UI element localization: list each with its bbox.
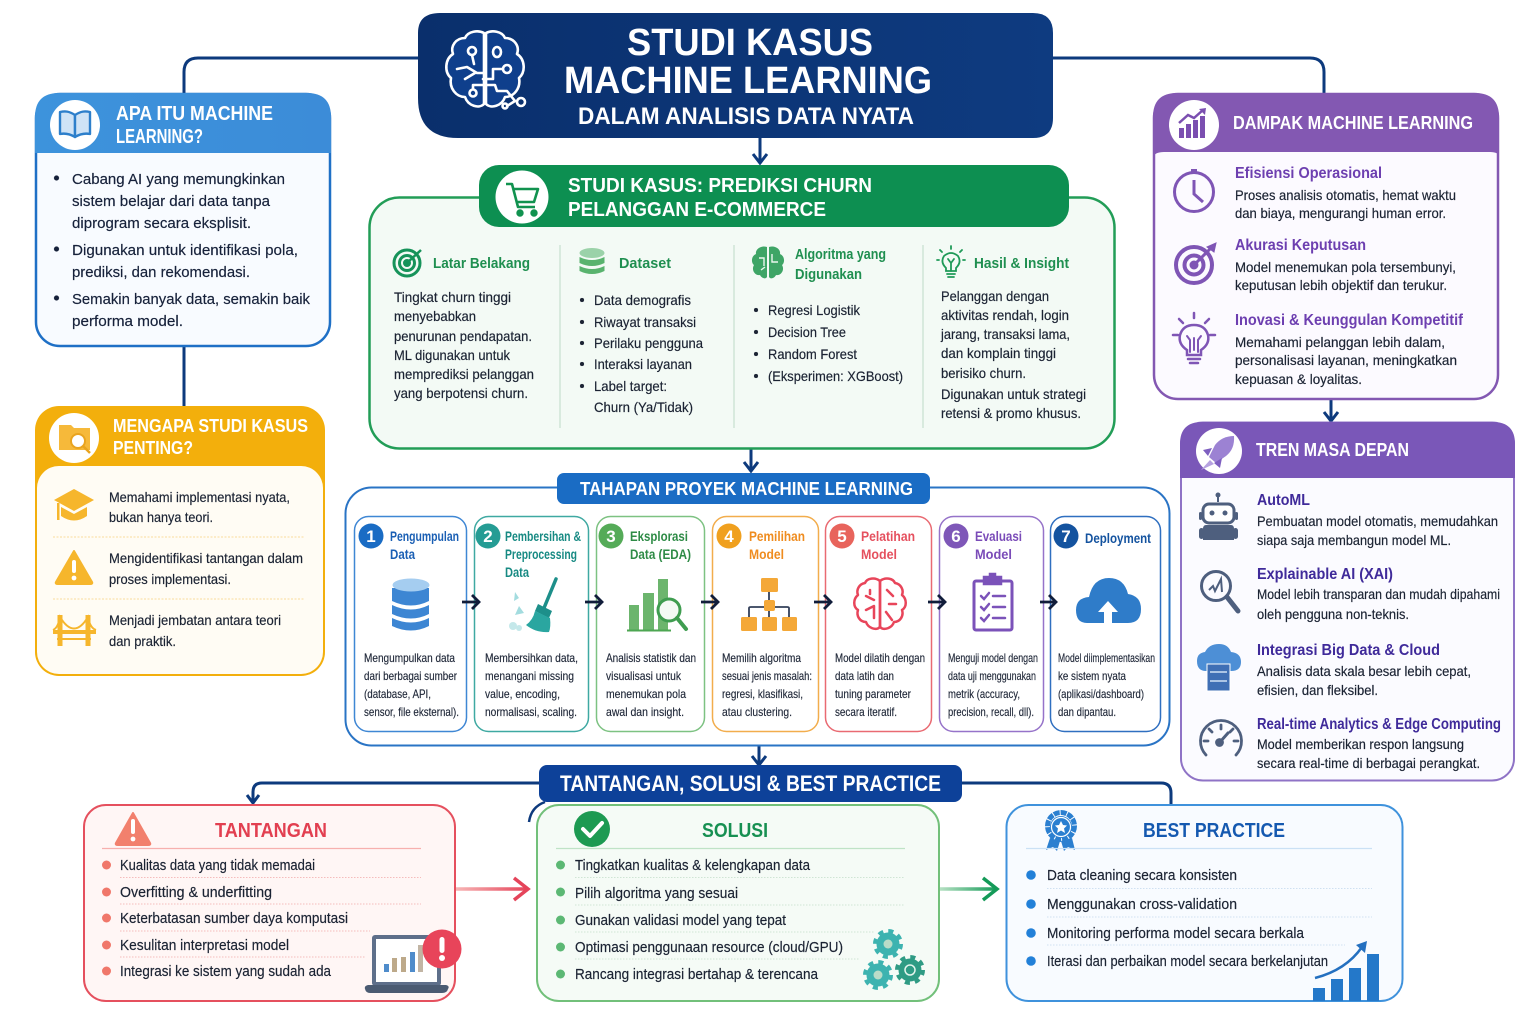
- icon: rocket: [1201, 436, 1234, 470]
- icon: green brain: [752, 247, 784, 278]
- icon: open book: [60, 111, 90, 137]
- trend 2: Explainable AI (XAI): [1257, 566, 1393, 583]
- header text: STUDI KASUS: PREDIKSI CHURN: [568, 175, 872, 197]
- icon: database: [580, 248, 604, 274]
- heading: BEST PRACTICE: [1143, 820, 1285, 842]
- body text: menyebabkan: [394, 308, 476, 324]
- icon: clock: [1174, 170, 1214, 212]
- stage title: Data: [390, 546, 415, 562]
- trend 2: oleh pengguna non-teknis.: [1257, 606, 1409, 622]
- trend 1: [1257, 492, 1498, 548]
- trend 1: siapa saja membangun model ML.: [1257, 532, 1451, 548]
- band: tantangan solusi best practice: [539, 765, 962, 802]
- icon: ribbon badge: [1046, 812, 1075, 851]
- heading: PENTING?: [113, 438, 193, 458]
- stage title: [975, 528, 1022, 562]
- panel: best practice: [1006, 805, 1402, 1001]
- title banner: [418, 13, 1053, 138]
- reason 2: Mengidentifikasi tantangan dalam: [109, 550, 303, 566]
- challenge list: Keterbatasan sumber daya komputasi: [120, 911, 348, 927]
- body text: [940, 288, 1086, 421]
- body text: Pelanggan dengan: [941, 288, 1049, 304]
- icon: laptop with alert: [365, 930, 462, 993]
- number badge: [358, 524, 384, 548]
- title text: DALAM ANALISIS DATA NYATA: [578, 103, 914, 130]
- number badge: 2: [483, 527, 493, 546]
- icon: gauge: [1200, 721, 1241, 755]
- heading: Latar Belakang: [433, 255, 530, 272]
- stage description: [485, 651, 578, 719]
- impact 1: Efisiensi Operasional: [1235, 165, 1382, 182]
- connector: title to left panel: [184, 58, 418, 94]
- body text: memprediksi pelanggan: [394, 366, 534, 382]
- body text: aktivitas rendah, login: [941, 307, 1069, 323]
- number badge: 1: [366, 527, 376, 546]
- bullet list: Label target:: [594, 378, 667, 394]
- icon: purple target: [1176, 243, 1216, 283]
- stage description: sensor, file eksternal).: [364, 705, 459, 719]
- stage title: [749, 528, 805, 562]
- bullet list: Riwayat transaksi: [594, 314, 696, 330]
- reason 3: dan praktik.: [109, 633, 176, 649]
- icon: rising bars: [1313, 941, 1379, 1001]
- reason 2: proses implementasi.: [109, 571, 231, 587]
- heading: LEARNING?: [116, 126, 203, 148]
- stage title: Pelatihan: [861, 528, 915, 544]
- heading: Digunakan: [795, 266, 862, 283]
- connector: band to best practice: [961, 783, 1171, 806]
- stage description: precision, recall, dll).: [948, 705, 1034, 719]
- challenge list: Kesulitan interpretasi model: [120, 938, 289, 954]
- impact 1: [1235, 165, 1456, 221]
- stage description: ke sistem nyata: [1058, 669, 1126, 683]
- number badge: 6: [951, 527, 961, 546]
- icon: target: [394, 250, 421, 276]
- trend 1: Pembuatan model otomatis, memudahkan: [1257, 513, 1498, 529]
- bullet list: Churn (Ya/Tidak): [594, 399, 693, 415]
- stage description: Model dilatih dengan: [835, 651, 925, 665]
- heading: [113, 416, 308, 458]
- stage description: data uji menggunakan: [948, 669, 1036, 683]
- arrow: tantangan to solusi: [456, 878, 528, 900]
- icon: cloud server: [1197, 644, 1241, 691]
- trend 4: Model memberikan respon langsung: [1257, 736, 1464, 752]
- stage description: Mengumpulkan data: [364, 651, 455, 665]
- stage description: Menguji model dengan: [948, 651, 1038, 665]
- impact 3: personalisasi layanan, meningkatkan: [1235, 352, 1457, 368]
- stage description: dan dipantau.: [1058, 705, 1116, 719]
- icon: robot: [1199, 492, 1238, 540]
- stage description: value, encoding,: [485, 687, 560, 701]
- challenge list: Integrasi ke sistem yang sudah ada: [120, 964, 332, 980]
- bullet list: Regresi Logistik: [768, 302, 861, 318]
- panel: tahapan proyek: [346, 473, 1170, 746]
- trend 3: efisien, dan fleksibel.: [1257, 682, 1378, 698]
- best practice list: Menggunakan cross-validation: [1047, 897, 1237, 913]
- icon: gears: [866, 932, 922, 988]
- stage title: Pemilihan: [749, 528, 805, 544]
- stage description: menangani missing: [485, 669, 574, 683]
- icon: warning: [56, 551, 92, 584]
- stage description: secara iteratif.: [835, 705, 897, 719]
- bullet list: Data demografis: [594, 292, 691, 308]
- panel: tren masa depan: [1180, 422, 1515, 780]
- stage description: regresi, klasifikasi,: [722, 687, 803, 701]
- solution list: Rancang integrasi bertahap & terencana: [575, 967, 819, 983]
- stage description: [835, 651, 925, 719]
- heading: [116, 103, 273, 148]
- bullet list: sistem belajar dari data tanpa: [72, 193, 271, 210]
- bullet list: Cabang AI yang memungkinkan: [72, 171, 285, 188]
- trend 4: secara real-time di berbagai perangkat.: [1257, 755, 1480, 771]
- icon: check circle: [574, 811, 610, 847]
- impact 3: [1235, 312, 1464, 387]
- body text: dan komplain tinggi: [941, 345, 1056, 361]
- bullet list: Random Forest: [768, 346, 857, 362]
- body text: penurunan pendapatan.: [394, 328, 532, 344]
- icon: bridge: [53, 615, 96, 646]
- solution list: Gunakan validasi model yang tepat: [575, 913, 786, 929]
- stage title: Eksplorasi: [630, 528, 688, 544]
- impact 2: Akurasi Keputusan: [1235, 237, 1366, 254]
- arrow: solusi to best practice: [940, 878, 997, 900]
- body text: ML digunakan untuk: [394, 347, 511, 363]
- trend 1: AutoML: [1257, 492, 1310, 509]
- connector: band to tantangan: [247, 783, 540, 803]
- bullet list: Perilaku pengguna: [594, 335, 703, 351]
- panel: tantangan: [84, 805, 462, 1001]
- stage title: Model: [975, 546, 1012, 562]
- impact 3: kepuasan & loyalitas.: [1235, 371, 1362, 387]
- body text: jarang, transaksi lama,: [940, 326, 1070, 342]
- reason 1: Memahami implementasi nyata,: [109, 489, 290, 505]
- trend 2: [1257, 566, 1500, 622]
- bullet list: [754, 302, 903, 384]
- trend 3: Analisis data skala besar lebih cepat,: [1257, 663, 1471, 679]
- column: latar belakang: [394, 250, 534, 401]
- stage title: Data: [505, 564, 529, 580]
- stage title: [390, 528, 459, 562]
- icon: magnifier analytics: [1202, 572, 1238, 611]
- best practice list: Iterasi dan perbaikan model secara berkelanjutan: [1047, 954, 1328, 970]
- reason 1: bukan hanya teori.: [109, 509, 213, 525]
- icon: purple bulb: [1173, 313, 1215, 363]
- stage 4: [712, 516, 818, 732]
- heading: [795, 246, 886, 283]
- stage 2: [474, 516, 588, 732]
- heading: TREN MASA DEPAN: [1256, 440, 1409, 460]
- icon: light bulb: [937, 246, 965, 277]
- stage 3: [596, 516, 704, 732]
- bullet list: prediksi, dan rekomendasi.: [72, 264, 250, 281]
- reason 3: [109, 612, 281, 649]
- column: dataset: [580, 248, 703, 415]
- stage 5: [826, 516, 932, 732]
- icon: circuit brain: [446, 31, 525, 108]
- body text: [394, 289, 534, 401]
- impact 2: [1235, 237, 1456, 293]
- stage title: [505, 528, 581, 580]
- stages header: TAHAPAN PROYEK MACHINE LEARNING: [580, 479, 913, 499]
- number badge: 3: [606, 527, 616, 546]
- stage description: Analisis statistik dan: [606, 651, 696, 665]
- case study header: [479, 165, 1069, 227]
- trend 2: Model lebih transparan dan mudah dipahami: [1257, 586, 1500, 602]
- stage description: data latih dan: [835, 669, 894, 683]
- stage description: dari berbagai sumber: [364, 669, 457, 683]
- stage title: Pengumpulan: [390, 528, 459, 544]
- stage description: (database, API,: [364, 687, 431, 701]
- number badge: 4: [724, 527, 734, 546]
- stage 6: [940, 516, 1044, 732]
- best practice list: [1026, 868, 1328, 970]
- panel: solusi: [537, 805, 939, 1001]
- heading: SOLUSI: [702, 820, 768, 842]
- stage title: [861, 528, 915, 562]
- trend 4: Real-time Analytics & Edge Computing: [1257, 716, 1501, 733]
- icon: warning triangle: [116, 813, 150, 845]
- heading: APA ITU MACHINE: [116, 103, 273, 125]
- icon: clipboard checklist: [974, 574, 1012, 630]
- number badge: [830, 524, 854, 548]
- best practice list: Data cleaning secara konsisten: [1047, 868, 1237, 884]
- heading: Dataset: [619, 255, 671, 272]
- connector: title to right panel: [1053, 58, 1324, 94]
- title text: MACHINE LEARNING: [564, 60, 932, 102]
- stage title: Model: [861, 546, 897, 562]
- stage title: Model: [749, 546, 784, 562]
- arrow: impact to trends: [1324, 400, 1338, 421]
- bullet list: [580, 292, 703, 415]
- stage description: [722, 651, 812, 719]
- heading: DAMPAK MACHINE LEARNING: [1233, 113, 1473, 133]
- reason 1: [109, 489, 290, 525]
- challenge list: [102, 858, 348, 980]
- stage description: [1058, 651, 1155, 719]
- heading: Algoritma yang: [795, 246, 886, 263]
- header text: [568, 175, 872, 221]
- challenge list: Kualitas data yang tidak memadai: [120, 858, 315, 874]
- connector: band to solusi: [529, 802, 545, 822]
- bullet list: performa model.: [72, 313, 183, 330]
- panel: dampak machine learning: [1153, 93, 1499, 399]
- solution list: Tingkatkan kualitas & kelengkapan data: [575, 858, 811, 874]
- arrows between stages: [462, 595, 1056, 609]
- stage description: (aplikasi/dashboard): [1058, 687, 1144, 701]
- icon: red brain: [854, 579, 906, 629]
- stage description: Model diimplementasikan: [1058, 651, 1155, 665]
- trend 4: [1257, 716, 1501, 771]
- number badge: 5: [837, 527, 847, 546]
- number badge: 7: [1061, 527, 1071, 546]
- icon: bars with magnifier: [627, 579, 686, 631]
- icon: graduation cap: [54, 489, 94, 520]
- best practice list: Monitoring performa model secara berkala: [1047, 926, 1305, 942]
- impact 2: keputusan lebih objektif dan terukur.: [1235, 277, 1447, 293]
- stage description: sesuai jenis masalah:: [722, 669, 812, 683]
- body text: Digunakan untuk strategi: [941, 386, 1086, 402]
- stage description: [606, 651, 696, 719]
- stage description: visualisasi untuk: [606, 669, 681, 683]
- impact 3: Inovasi & Keunggulan Kompetitif: [1235, 312, 1464, 329]
- stage description: tuning parameter: [835, 687, 911, 701]
- icon: hierarchy: [741, 578, 797, 631]
- stage description: metrik (accuracy,: [948, 687, 1020, 701]
- stage description: Memilih algoritma: [722, 651, 801, 665]
- panel: studi kasus prediksi churn: [370, 165, 1114, 448]
- heading: TANTANGAN: [215, 820, 327, 842]
- stage 1: [354, 516, 466, 732]
- icon: folder search: [59, 425, 90, 453]
- icon: broom: [509, 579, 556, 632]
- title text: STUDI KASUS: [627, 22, 873, 64]
- bullet list: Decision Tree: [768, 324, 846, 340]
- number badge: [944, 524, 968, 548]
- icon: cloud upload: [1076, 578, 1141, 623]
- heading: MENGAPA STUDI KASUS: [113, 416, 308, 436]
- icon: growth chart: [1179, 108, 1206, 138]
- stage description: menemukan pola: [606, 687, 686, 701]
- stage title: [630, 528, 691, 562]
- reason 3: Menjadi jembatan antara teori: [109, 612, 281, 628]
- stage description: atau clustering.: [722, 705, 792, 719]
- column: algoritma: [752, 246, 903, 384]
- column: hasil dan insight: [937, 246, 1086, 421]
- number badge: [1054, 524, 1078, 548]
- bullet list: Digunakan untuk identifikasi pola,: [72, 242, 298, 259]
- stage description: awal dan insight.: [606, 705, 684, 719]
- heading: Hasil & Insight: [974, 255, 1069, 272]
- arrow: case study to project stages: [744, 449, 758, 471]
- body text: retensi & promo khusus.: [941, 405, 1081, 421]
- stage title: Deployment: [1085, 530, 1151, 546]
- connector: left panels: [182, 346, 186, 407]
- stage title: Evaluasi: [975, 528, 1022, 544]
- bullet list: (Eksperimen: XGBoost): [768, 368, 903, 384]
- body text: yang berpotensi churn.: [394, 385, 528, 401]
- stage title: Preprocessing: [505, 546, 577, 562]
- stage title: Data (EDA): [630, 546, 691, 562]
- stages header: [557, 473, 930, 504]
- icon: database: [392, 578, 430, 630]
- panel: mengapa studi kasus penting: [35, 406, 325, 676]
- body text: berisiko churn.: [941, 365, 1026, 381]
- title text: [564, 22, 932, 130]
- panel: apa itu machine learning: [35, 93, 331, 346]
- reason 2: [109, 550, 303, 587]
- bullet list: Semakin banyak data, semakin baik: [72, 291, 310, 308]
- body text: Tingkat churn tinggi: [394, 289, 511, 305]
- number badge: [716, 524, 742, 548]
- icon: shopping cart: [506, 184, 538, 215]
- solution list: Optimasi penggunaan resource (cloud/GPU): [575, 940, 843, 956]
- impact 3: Memahami pelanggan lebih dalam,: [1235, 334, 1445, 350]
- number badge: [476, 524, 500, 548]
- impact 1: Proses analisis otomatis, hemat waktu: [1235, 187, 1456, 203]
- header text: PELANGGAN E-COMMERCE: [568, 199, 826, 221]
- stage description: Membersihkan data,: [485, 651, 578, 665]
- bullet list: Interaksi layanan: [594, 356, 692, 372]
- stage description: [364, 651, 459, 719]
- bullet list: [54, 171, 310, 330]
- trend 3: Integrasi Big Data & Cloud: [1257, 642, 1440, 659]
- arrow: project stages to challenges band: [752, 746, 766, 765]
- arrow: title to case study: [753, 138, 767, 163]
- trend 3: [1257, 642, 1471, 698]
- stage title: Pembersihan &: [505, 528, 581, 544]
- bullet list: diprogram secara eksplisit.: [72, 215, 251, 232]
- solution list: [556, 858, 843, 983]
- stage description: normalisasi, scaling.: [485, 705, 577, 719]
- stage description: [948, 651, 1038, 719]
- impact 1: dan biaya, mengurangi human error.: [1235, 205, 1446, 221]
- band: tantangan solusi best practice: TANTANGAN, SOLUSI & BEST PRACTICE: [560, 771, 941, 796]
- impact 2: Model menemukan pola tersembunyi,: [1235, 259, 1456, 275]
- number badge: [598, 524, 624, 548]
- stage 7: [1050, 516, 1160, 732]
- challenge list: Overfitting & underfitting: [120, 885, 272, 901]
- solution list: Pilih algoritma yang sesuai: [575, 886, 738, 902]
